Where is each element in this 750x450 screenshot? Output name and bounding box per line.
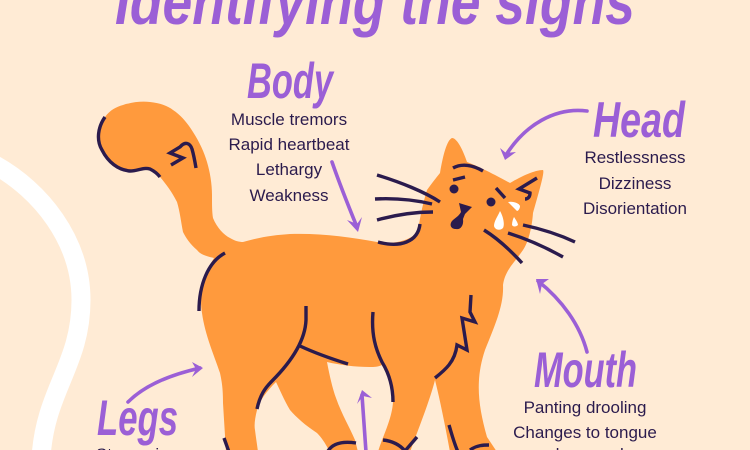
heading: head: Head xyxy=(593,92,686,148)
brows xyxy=(453,165,505,198)
symptom list: head: Disorientation xyxy=(583,199,687,218)
symptom list: body: Rapid heartbeat xyxy=(229,135,350,154)
nose and mouth xyxy=(451,203,472,229)
symptom list: mouth: Changes to tongue xyxy=(513,423,657,442)
section: mouth xyxy=(513,342,657,450)
heading: legs: Legs xyxy=(97,390,178,446)
cat illustration xyxy=(98,102,575,450)
body outlines xyxy=(199,253,225,311)
arrow: body xyxy=(332,162,362,232)
whiskers right xyxy=(484,225,575,263)
paws xyxy=(224,425,489,450)
tail fur mark xyxy=(170,143,196,168)
symptom list: body: Lethargy xyxy=(256,160,323,179)
arrow: bottom xyxy=(357,390,372,450)
symptom list: head: Dizziness xyxy=(599,174,671,193)
heading: mouth: Mouth xyxy=(534,342,637,398)
arrow: mouth xyxy=(536,279,587,352)
heading: body: Body xyxy=(247,53,335,109)
symptom list: mouth: Panting drooling xyxy=(524,398,646,417)
cat body xyxy=(98,102,543,450)
tears xyxy=(494,202,520,230)
section: legs xyxy=(96,390,178,450)
section: head xyxy=(583,92,687,218)
arrow: legs xyxy=(128,362,203,402)
symptom list: head: Restlessness xyxy=(584,148,686,167)
symptom list: body: Weakness xyxy=(249,186,329,205)
ear mark xyxy=(519,178,537,199)
eyes xyxy=(450,184,458,194)
face xyxy=(375,165,575,263)
chest fur xyxy=(435,295,475,378)
symptom list: body: Muscle tremors xyxy=(231,110,347,129)
background white curve xyxy=(0,165,81,450)
section: body xyxy=(229,53,350,205)
whiskers left xyxy=(375,175,440,244)
tail outline xyxy=(98,117,160,177)
arrow: head xyxy=(500,110,587,160)
